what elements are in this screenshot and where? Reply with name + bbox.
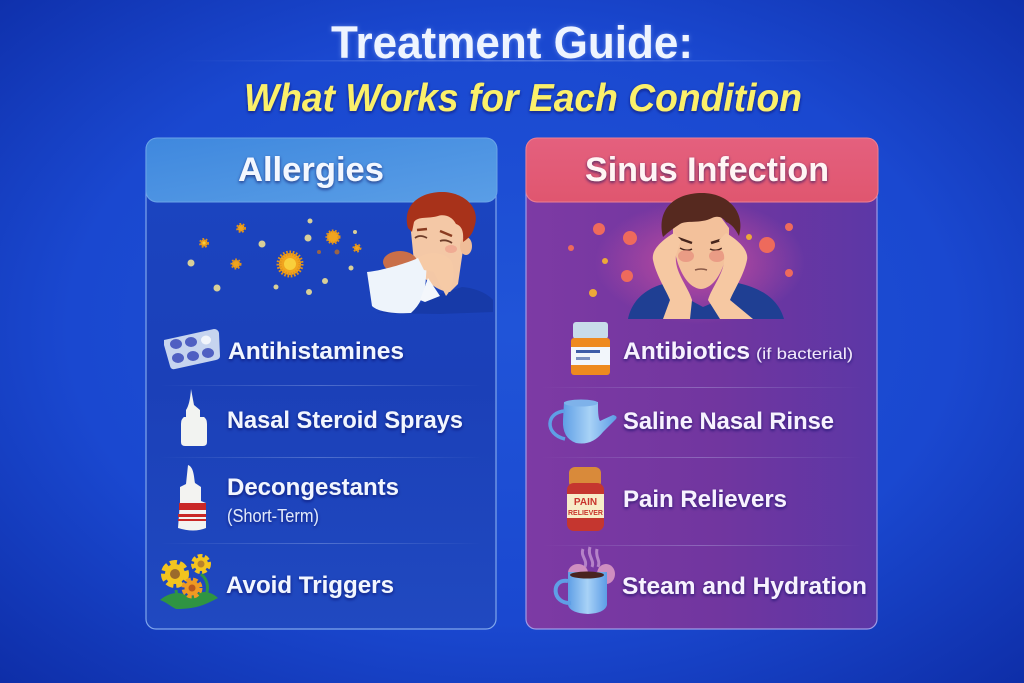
icon: flowers <box>160 557 218 609</box>
label: antihistamines: Antihistamines <box>228 338 404 365</box>
label: avoid triggers: Avoid Triggers <box>226 572 394 599</box>
panel header <box>526 138 878 202</box>
icon: blister pack <box>164 329 220 369</box>
illustration: man with headache <box>628 193 784 319</box>
panel: allergies <box>146 138 497 629</box>
label: saline nasal rinse: Saline Nasal Rinse <box>623 408 834 435</box>
label: if bacterial: (if bacterial) <box>756 346 853 363</box>
panel header <box>146 138 497 202</box>
icon: decongestant bottle <box>178 465 206 530</box>
icon: antibiotics jar <box>571 322 610 375</box>
heading: Sinus Infection <box>585 151 829 189</box>
icon: neti pot <box>550 400 617 444</box>
label: short-term: (Short-Term) <box>227 506 319 526</box>
icon: pain reliever bottle: RELIEVER <box>568 510 603 517</box>
icon: pain reliever bottle: PAIN <box>574 497 597 508</box>
label: steam and hydration: Steam and Hydration <box>622 573 867 600</box>
panel: sinus infection <box>526 138 878 629</box>
panel body <box>526 140 877 629</box>
label: nasal steroid sprays: Nasal Steroid Sprays <box>227 407 463 434</box>
title line 2: What Works for Each Condition <box>244 77 802 120</box>
icon: steaming mug <box>556 547 615 614</box>
icon: pain reliever bottle <box>567 467 604 531</box>
list: treatments <box>160 329 482 609</box>
label: pain relievers: Pain Relievers <box>623 486 787 513</box>
label: antibiotics: Antibiotics <box>623 338 750 365</box>
icon: nasal spray <box>181 389 207 446</box>
list: treatments <box>540 322 867 614</box>
glow and inflamed particles <box>568 200 805 324</box>
illustration: sneezing man <box>367 192 493 314</box>
title <box>180 17 844 120</box>
label: decongestants: Decongestants <box>227 474 399 501</box>
pollen particles <box>188 218 360 295</box>
panel body <box>146 140 496 629</box>
heading: Allergies <box>238 151 384 189</box>
title line 1: Treatment Guide: <box>331 17 693 68</box>
